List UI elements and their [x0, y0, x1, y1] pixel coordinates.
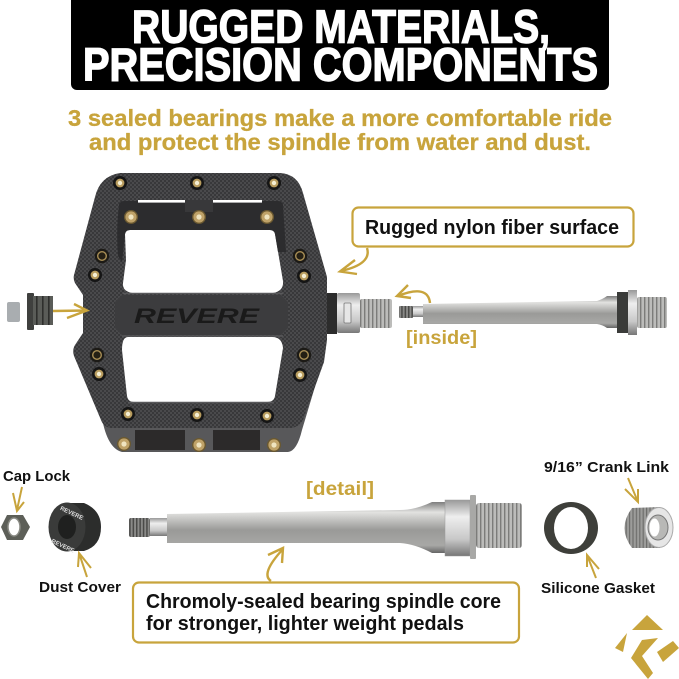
arrow: crank link	[625, 478, 638, 502]
arrow: dust cover	[78, 553, 91, 577]
window rims	[122, 294, 283, 402]
arrow: callout to pedal	[340, 248, 368, 274]
arrow: dust cover to pedal	[53, 304, 87, 318]
label: dust cover: Dust Cover	[39, 579, 121, 596]
arrow: detail callout to spindle	[267, 548, 283, 581]
dust cover: REVERE	[59, 506, 84, 522]
title banner: PRECISION COMPONENTS	[83, 38, 598, 90]
pins	[88, 176, 311, 452]
upper recess	[117, 201, 286, 262]
exploded cap lock and dust cover	[7, 293, 53, 330]
frame slots	[138, 200, 262, 203]
callout: chromoly spindle: Chromoly-sealed bearing spindle core	[146, 591, 501, 613]
subtitle	[68, 105, 612, 155]
brand mark on pedal: REVERE	[134, 305, 260, 328]
pedal body	[73, 173, 327, 452]
callout: rugged nylon: Rugged nylon fiber surface	[365, 217, 619, 239]
arrow: cap lock	[13, 487, 24, 511]
cap lock nut	[1, 515, 30, 540]
label: inside: [inside]	[406, 328, 477, 349]
callout: rugged nylon	[352, 208, 634, 246]
cross bar	[115, 295, 288, 335]
bottom recess	[135, 430, 260, 450]
label: detail: [detail]	[306, 479, 374, 500]
title banner	[71, 0, 609, 90]
spindle: detail view	[129, 495, 522, 559]
label: cap lock: Cap Lock	[3, 468, 71, 485]
label: crank link: 9/16” Crank Link	[544, 459, 670, 476]
crank link plug	[624, 507, 673, 548]
arrow: silicone gasket	[587, 555, 599, 578]
subtitle: and protect the spindle from water and dust.	[89, 129, 591, 155]
title banner: RUGGED MATERIALS,	[132, 0, 550, 52]
dust cover	[48, 502, 101, 555]
dust cover: REVERE	[50, 539, 75, 555]
silicone gasket ring	[544, 502, 598, 554]
callout: chromoly spindle: for stronger, lighter weight pedals	[146, 613, 464, 635]
label: silicone gasket: Silicone Gasket	[541, 580, 655, 597]
pedal axle hub	[327, 293, 392, 334]
brand logo	[615, 615, 679, 679]
spindle: inside view	[399, 290, 667, 335]
subtitle: 3 sealed bearings make a more comfortable ride	[68, 105, 612, 131]
callout: chromoly spindle	[133, 582, 519, 642]
frame centre tab	[185, 200, 213, 212]
arrow: spindle into hub	[397, 285, 430, 303]
